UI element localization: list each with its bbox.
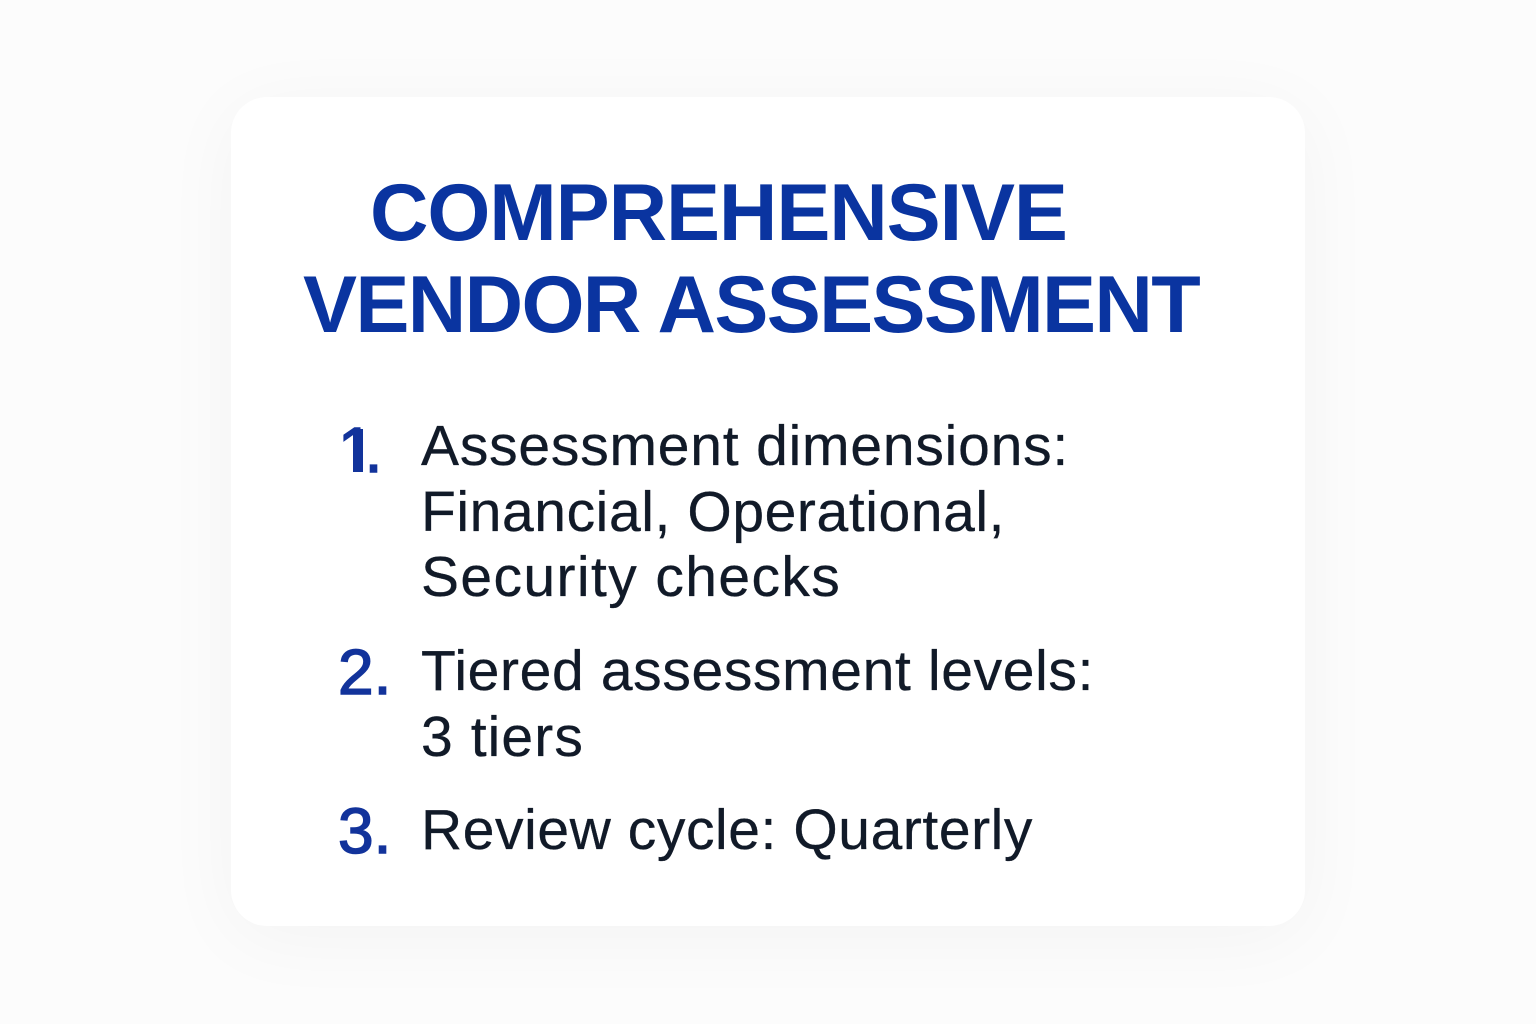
list item 2 <box>338 636 1094 768</box>
text: tiered levels: 3 tiers <box>421 704 584 768</box>
list item 1 <box>343 414 1069 609</box>
text: assessment dimensions <box>420 414 1069 609</box>
text: assessment dimensions: Assessment dimensions: <box>421 414 1069 478</box>
title: VENDOR ASSESSMENT <box>303 260 1199 350</box>
title: COMPREHENSIVE <box>370 168 1067 258</box>
number 1: 1 <box>338 414 365 486</box>
number 2: 2. <box>338 636 391 708</box>
title <box>303 168 1200 350</box>
list item 3 <box>338 795 1033 867</box>
number 1: . <box>365 414 382 486</box>
text: tiered levels: Tiered assessment levels: <box>421 639 1094 703</box>
text: review cycle: Review cycle: Quarterly <box>421 798 1033 862</box>
text: tiered levels <box>421 639 1094 768</box>
number 1 <box>343 414 382 486</box>
number 3: 3. <box>338 795 391 867</box>
text: assessment dimensions: Security checks <box>421 545 841 609</box>
panel: assessment card <box>231 97 1305 926</box>
text: assessment dimensions: Financial, Operational, <box>421 480 1005 544</box>
